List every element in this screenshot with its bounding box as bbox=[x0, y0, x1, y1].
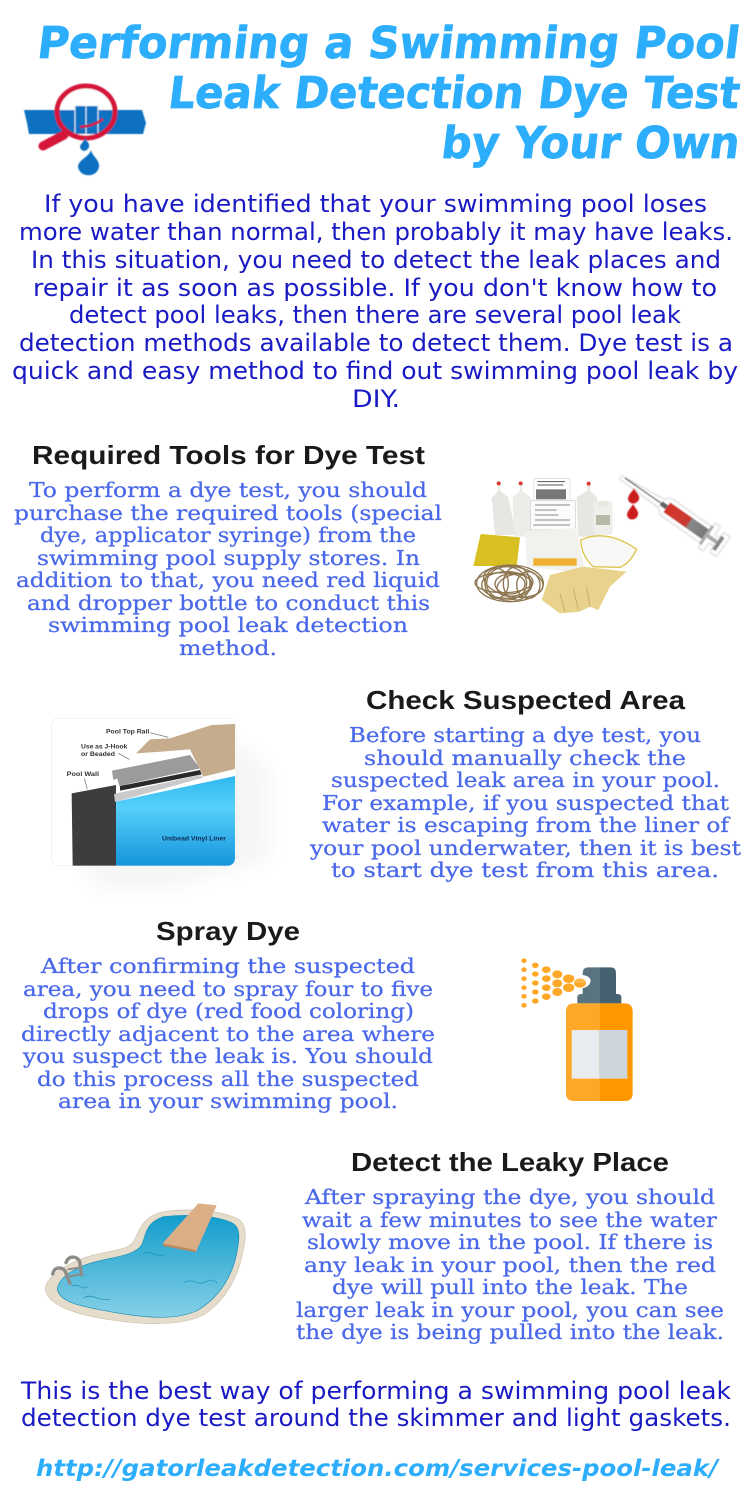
text block: required tools: method. bbox=[179, 636, 277, 660]
intro paragraph: detection methods available to detect them. Dye test is a bbox=[19, 329, 733, 357]
text block: detect the leaky place: wait a few minutes to see the water bbox=[302, 1208, 717, 1232]
image: pool wall diagram: Use as J-Hook bbox=[81, 744, 128, 751]
panel: spray dye bbox=[21, 916, 633, 1113]
heading: detect the leaky place: Detect the Leaky Place bbox=[351, 1147, 669, 1177]
image: pool wall diagram bbox=[52, 718, 270, 890]
text block: detect the leaky place: the dye is being pulled into the leak. bbox=[296, 1320, 724, 1344]
text block: required tools bbox=[14, 478, 442, 660]
text block: spray dye bbox=[21, 954, 435, 1113]
text block: required tools: purchase the required tools (special bbox=[14, 501, 442, 525]
panel: check suspected area bbox=[52, 685, 742, 890]
intro paragraph: detect pool leaks, then there are several pool leak bbox=[69, 301, 681, 329]
text block: detect the leaky place: dye will pull into the leak. The bbox=[332, 1275, 688, 1299]
text block: spray dye: After confirming the suspected bbox=[40, 954, 415, 978]
text block: check suspected area: to start dye test from this area. bbox=[331, 858, 719, 882]
text block: detect the leaky place: slowly move in the pool. If there is bbox=[307, 1230, 713, 1254]
panel: detect the leaky place bbox=[45, 1147, 724, 1344]
icon: spray bottle bbox=[521, 958, 633, 1101]
image: pool wall diagram: Pool Top Rail bbox=[106, 728, 149, 735]
heading: spray dye: Spray Dye bbox=[156, 916, 300, 946]
text block: check suspected area: For example, if you suspected that bbox=[322, 791, 730, 815]
text block: spray dye: you suspect the leak is. You should bbox=[22, 1044, 433, 1068]
text block: check suspected area bbox=[309, 723, 742, 882]
text block: required tools: To perform a dye test, you should bbox=[29, 478, 427, 502]
image: pool wall diagram: or Beaded bbox=[81, 751, 115, 758]
icon: leaking pipe under magnifying glass bbox=[24, 86, 146, 175]
text block: check suspected area: water is escaping from the liner of bbox=[322, 813, 731, 837]
closing paragraph: detection dye test around the skimmer and light gaskets. bbox=[21, 1404, 731, 1432]
intro paragraph bbox=[12, 190, 738, 413]
image: pool wall diagram: Unibead Vinyl Liner bbox=[162, 836, 226, 843]
image: pool wall diagram: Pool Wall bbox=[67, 771, 99, 778]
title: Performing a Swimming Pool bbox=[35, 18, 743, 69]
intro paragraph: more water than normal, then probably it may have leaks. bbox=[19, 218, 733, 246]
intro paragraph: If you have identified that your swimming pool loses bbox=[44, 190, 707, 218]
text block: spray dye: area, you need to spray four to five bbox=[23, 977, 433, 1001]
text block: check suspected area: Before starting a dye test, you bbox=[349, 723, 701, 747]
closing paragraph: This is the best way of performing a swimming pool leak bbox=[20, 1377, 731, 1405]
text block: check suspected area: suspected leak area in your pool. bbox=[331, 768, 720, 792]
title: by Your Own bbox=[439, 118, 743, 169]
text block: detect the leaky place: any leak in your pool, then the red bbox=[304, 1253, 716, 1277]
icon: syringe with blood drops bbox=[613, 463, 732, 559]
text block: spray dye: area in your swimming pool. bbox=[58, 1089, 398, 1113]
intro paragraph: In this situation, you need to detect the leak places and bbox=[31, 246, 721, 274]
text block: detect the leaky place: After spraying the dye, you should bbox=[304, 1185, 715, 1209]
text block: detect the leaky place bbox=[296, 1185, 724, 1344]
panel: required tools bbox=[14, 440, 732, 660]
closing paragraph bbox=[20, 1377, 731, 1432]
text block: required tools: swimming pool leak detection bbox=[48, 613, 408, 637]
text block: spray dye: directly adjacent to the area where bbox=[21, 1022, 435, 1046]
text block: detect the leaky place: larger leak in your pool, you can see bbox=[296, 1298, 724, 1322]
text block: required tools: swimming pool supply stores. In bbox=[37, 546, 420, 570]
intro paragraph: quick and easy method to find out swimming pool leak by bbox=[12, 357, 738, 385]
illustration: swimming pool with diving board bbox=[45, 1203, 245, 1324]
website link: http://gatorleakdetection.com/services-pool-leak/ bbox=[36, 1456, 720, 1482]
heading: check suspected area: Check Suspected Area bbox=[366, 685, 686, 715]
heading: required tools: Required Tools for Dye Test bbox=[32, 440, 425, 470]
intro paragraph: repair it as soon as possible. If you don't know how to bbox=[33, 274, 717, 302]
text block: check suspected area: your pool underwater, then it is best bbox=[309, 836, 742, 860]
text block: required tools: and dropper bottle to conduct this bbox=[27, 591, 430, 615]
intro paragraph: DIY. bbox=[352, 385, 400, 413]
text block: spray dye: do this process all the suspected bbox=[37, 1067, 419, 1091]
title bbox=[35, 18, 743, 169]
text block: spray dye: drops of dye (red food coloring) bbox=[43, 999, 414, 1023]
text block: required tools: dye, applicator syringe) from the bbox=[40, 523, 416, 547]
text block: check suspected area: should manually check the bbox=[364, 746, 686, 770]
text block: required tools: addition to that, you need red liquid bbox=[16, 568, 440, 592]
image: dye test kit bbox=[473, 478, 637, 613]
